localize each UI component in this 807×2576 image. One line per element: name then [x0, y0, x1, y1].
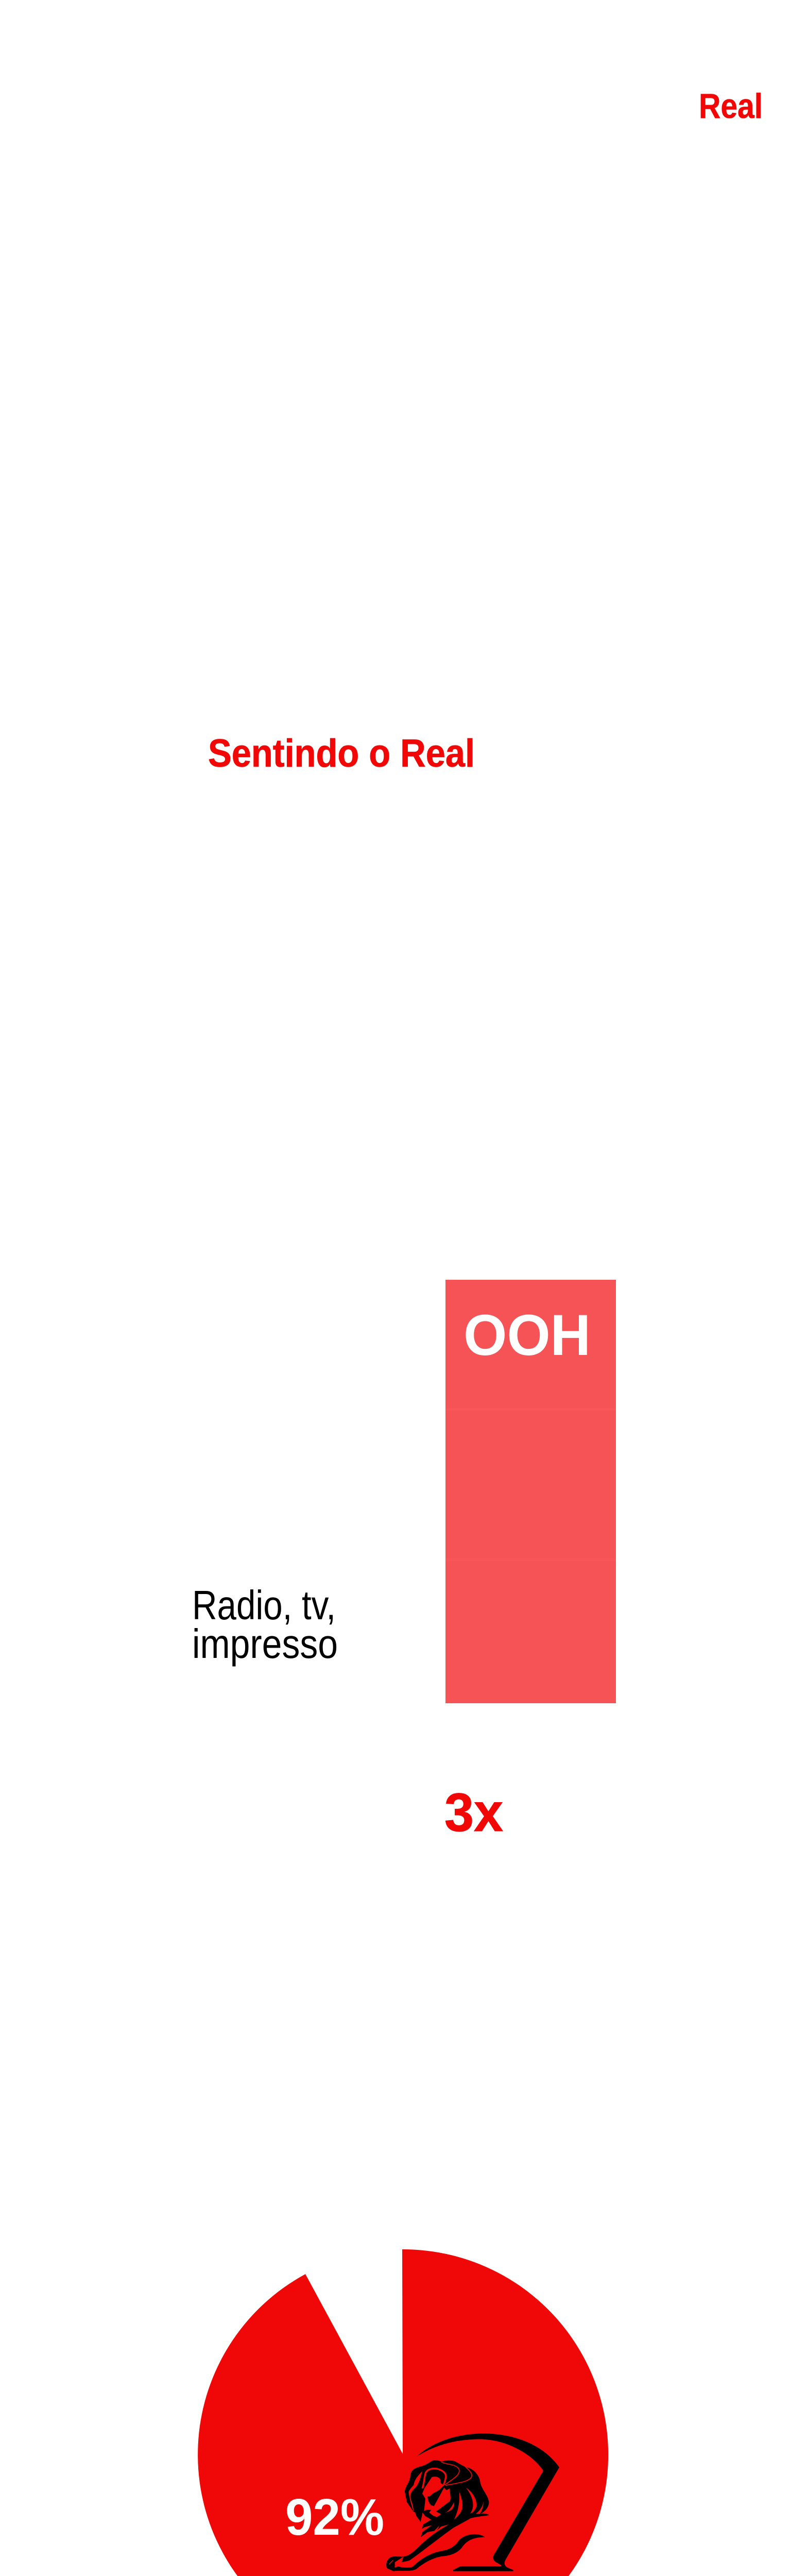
heading: Sentindo o Real: Sentindo o Real — [208, 732, 475, 775]
label: Radio, tv, impresso — [192, 1582, 338, 1667]
pie label: 92%: 92% — [285, 2488, 384, 2546]
stat: 3x: 3x — [444, 1783, 503, 1843]
heading: Real: Real — [699, 87, 763, 126]
label: Radio, tv, impresso: impresso — [192, 1621, 338, 1667]
label: Radio, tv, impresso: Radio, tv, — [192, 1582, 336, 1628]
icon: Cannes Lions lion — [386, 2433, 559, 2571]
bar label: OOH: OOH — [463, 1303, 591, 1367]
pie chart: 92% — [198, 2249, 608, 2576]
bar chart: OOH stacked bar — [445, 1280, 616, 1703]
